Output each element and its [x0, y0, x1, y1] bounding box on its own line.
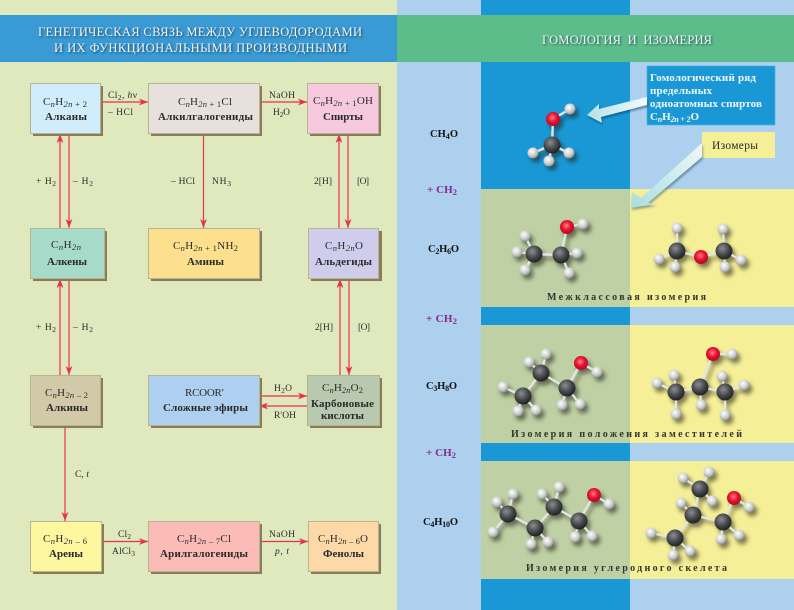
box: alcohols: n: [321, 98, 325, 108]
reaction condition labels: – HCl: [107, 108, 133, 118]
molecular formulas and CH2 increments: + CH: [426, 313, 452, 325]
box: alkenes: [30, 228, 107, 281]
reaction condition labels: 2[H]: [314, 177, 332, 187]
box: carboxylic acids: Карбоновые: [311, 398, 374, 410]
box: arenes: Арены: [49, 548, 83, 560]
box: alkenes: C: [51, 239, 58, 251]
box: alkenes: H: [64, 239, 72, 251]
reaction condition labels: AlCl: [112, 547, 131, 557]
box: aryl halides: Cl: [220, 533, 231, 545]
box: carboxylic acids: O: [351, 382, 359, 394]
box: alkenes: Алкены: [47, 256, 87, 268]
box: aldehydes: Альдегиды: [315, 256, 372, 268]
box: amines: C: [173, 240, 180, 252]
box: arenes: 2n – 6: [64, 536, 87, 546]
box: aldehydes: C: [325, 240, 332, 252]
callout: homologous series: Гомологический ряд: [650, 72, 756, 84]
reaction condition labels: 2[H]: [315, 323, 333, 333]
box: carboxylic acids: C: [322, 382, 329, 394]
box: esters: Сложные эфиры: [163, 402, 248, 414]
molecular formulas and CH2 increments: 4: [430, 520, 434, 529]
box: alcohols: OH: [357, 95, 373, 107]
molecular formulas and CH2 increments: H: [437, 381, 445, 392]
reaction condition labels: – HCl: [170, 177, 195, 187]
box: alkynes: n: [53, 390, 57, 400]
box: aryl halides: C: [177, 533, 184, 545]
molecule: propan-1-ol: [498, 348, 602, 416]
box: alkyl halides: C: [178, 96, 185, 108]
right panel background: [397, 0, 794, 610]
box: arenes: C: [43, 533, 50, 545]
box: alkynes: 2n – 2: [65, 390, 88, 400]
box: phenols: Фенолы: [323, 548, 364, 560]
box: alkyl halides: Cl: [221, 96, 232, 108]
molecule: ethanol: [512, 218, 588, 278]
callout: homologous series: O: [690, 111, 699, 123]
box: phenols: H: [330, 533, 338, 545]
callout: homologous series: C: [650, 111, 658, 123]
box: alkanes: Алканы: [45, 111, 87, 123]
molecular formulas and CH2 increments: 10: [442, 520, 450, 529]
callout: isomers: Изомеры: [712, 140, 758, 152]
molecular formulas and CH2 increments: 3: [433, 384, 437, 393]
box: carboxylic acids: кислоты: [321, 410, 364, 422]
caption: interclass isomerism: Межклассовая изомерия: [547, 292, 707, 303]
reaction condition labels: H: [273, 108, 280, 118]
box: aldehydes: H: [337, 240, 345, 252]
box: carboxylic acids: H: [334, 382, 342, 394]
box: aryl halides: 2n – 7: [197, 536, 220, 546]
caption: positional isomerism: Изомерия положения заместителей: [511, 429, 742, 440]
molecular formulas and CH2 increments: 8: [445, 384, 449, 393]
box: alkyl halides: H: [190, 96, 198, 108]
reaction condition labels: + H: [36, 323, 52, 333]
box: aryl halides: H: [189, 533, 197, 545]
molecular formulas and CH2 increments: O: [451, 244, 459, 255]
callout: homologous series: [647, 66, 775, 125]
reaction condition labels: 2: [52, 325, 56, 334]
callout: isomers: [702, 132, 775, 158]
box: aldehydes: [308, 228, 382, 281]
molecular formulas and CH2 increments: C: [426, 381, 434, 392]
box: amines: [148, 228, 262, 281]
box: phenols: 2n – 6: [338, 536, 360, 546]
reaction condition labels: ,: [122, 91, 127, 101]
reaction condition labels: [O]: [357, 177, 369, 187]
box: alkenes: n: [59, 242, 63, 252]
molecular formulas and CH2 increments: + CH: [427, 184, 453, 196]
molecular formulas and CH2 increments: 4: [446, 132, 450, 141]
reaction condition labels: hν: [128, 91, 137, 101]
left panel background: [0, 0, 397, 610]
reaction condition labels: + H: [36, 177, 52, 187]
box: carboxylic acids: n: [329, 385, 334, 395]
reaction condition labels: O: [285, 384, 292, 394]
reaction condition labels: 2: [52, 179, 56, 188]
box: phenols: O: [360, 533, 368, 545]
reaction condition labels: H: [274, 384, 281, 394]
arrow: to isomers: [631, 143, 702, 208]
heading band: homology and isomerism: ГОМОЛОГИЯ И ИЗОМЕРИЯ: [542, 33, 712, 47]
reaction condition labels: Cl: [108, 91, 117, 101]
box: alkyl halides: [148, 84, 262, 136]
molecular formulas and CH2 increments: [423, 129, 459, 529]
box: aryl halides: Арилгалогениды: [160, 548, 248, 560]
box: alkynes: Алкины: [46, 402, 88, 414]
molecular formulas and CH2 increments: 2: [452, 450, 456, 460]
heading band: homology and isomerism: [397, 15, 794, 62]
box: amines: Амины: [187, 256, 224, 268]
box: alkanes: n: [51, 99, 55, 109]
box: arenes: n: [51, 536, 55, 546]
callout: homologous series: одноатомных спиртов: [650, 98, 762, 110]
reaction condition labels: R′OH: [274, 411, 296, 421]
callout: homologous series: 2n + 2: [670, 115, 691, 124]
box: phenols: n: [325, 536, 330, 546]
box: amines: NH: [217, 240, 233, 252]
box: alkyl halides: Алкилгалогениды: [158, 111, 253, 123]
box: phenols: C: [318, 533, 325, 545]
reaction condition labels: 2: [127, 532, 131, 541]
molecular formulas and CH2 increments: H: [439, 244, 447, 255]
molecular formulas and CH2 increments: C: [428, 244, 436, 255]
box: alcohols: Спирты: [323, 111, 363, 123]
box: carboxylic acids: 2n: [342, 385, 351, 395]
box: alcohols: 2n + 1: [333, 98, 357, 108]
box: esters: RCOOR′: [185, 387, 224, 399]
box: alkanes: [30, 84, 103, 136]
molecular formulas and CH2 increments: H: [434, 517, 442, 528]
box: amines: 2: [234, 243, 238, 253]
molecular formulas and CH2 increments: O: [450, 517, 458, 528]
box: amines: 2n + 1: [194, 243, 217, 253]
box: alcohols: C: [313, 95, 320, 107]
box: alkyl halides: n: [186, 99, 190, 109]
reaction arrows: [60, 102, 349, 542]
molecule: butan-1-ol: [488, 482, 614, 550]
reaction condition labels: Cl: [118, 530, 127, 540]
callout: homologous series: предельных: [650, 85, 712, 97]
box: amines: n: [181, 243, 185, 253]
molecular formulas and CH2 increments: 6: [447, 247, 451, 256]
box: alcohols: H: [325, 95, 333, 107]
reaction condition labels: NH: [212, 177, 226, 187]
reaction condition labels: 2: [89, 325, 93, 334]
box: aryl halides: n: [185, 536, 189, 546]
callout: homologous series: n: [658, 115, 663, 124]
callout: homologous series: H: [662, 111, 671, 123]
reaction condition labels: C, t: [75, 470, 89, 480]
reaction condition labels: [O]: [358, 323, 370, 333]
reaction condition labels: p, t: [274, 547, 289, 557]
box: alkynes: [30, 376, 103, 428]
box: aldehydes: n: [333, 243, 337, 253]
box: alkanes: C: [43, 96, 50, 108]
molecule: methanol: [528, 104, 576, 166]
box: carboxylic acids: [308, 376, 382, 428]
molecular formulas and CH2 increments: C: [423, 517, 431, 528]
box: aryl halides: [148, 522, 262, 574]
molecular formulas and CH2 increments: CH: [430, 129, 446, 140]
arrow: to methanol: [587, 97, 647, 123]
reaction condition labels: O: [283, 108, 290, 118]
box: carboxylic acids: 2: [359, 385, 363, 395]
molecular formulas and CH2 increments: 2: [453, 187, 457, 197]
box: alkynes: C: [45, 387, 52, 399]
reaction condition labels: 2: [118, 93, 122, 102]
box: esters: [148, 376, 262, 428]
box: alkanes: H: [55, 96, 63, 108]
box: alcohols: [308, 84, 381, 136]
box: amines: H: [185, 240, 193, 252]
molecule: dimethyl ether: [654, 222, 746, 272]
reaction condition labels: 2: [280, 110, 284, 119]
reaction condition labels: 2: [89, 179, 93, 188]
box: alkyl halides: 2n + 1: [198, 99, 221, 109]
box: alkynes: H: [57, 387, 65, 399]
molecular formulas and CH2 increments: 2: [453, 316, 457, 326]
reaction condition labels: NaOH: [269, 91, 295, 101]
heading band: genetic link: [0, 15, 397, 62]
box: aldehydes: O: [355, 240, 363, 252]
molecular formulas and CH2 increments: 2: [435, 247, 439, 256]
box: phenols: [308, 522, 381, 574]
reaction condition labels: – H: [73, 177, 88, 187]
molecule: propan-2-ol: [652, 347, 750, 420]
reaction condition labels: 3: [131, 549, 135, 558]
box: arenes: [30, 522, 104, 574]
box: arenes: H: [55, 533, 63, 545]
box: alkanes: 2n + 2: [64, 99, 87, 109]
reaction condition labels: [36, 91, 370, 558]
molecule: 2-methylpropan-1-ol: [646, 466, 754, 560]
caption: carbon skeleton isomerism: Изомерия углеродного скелета: [526, 563, 727, 574]
molecular formulas and CH2 increments: O: [450, 129, 458, 140]
reaction condition labels: – H: [73, 323, 88, 333]
heading band: genetic link: ГЕНЕТИЧЕСКАЯ СВЯЗЬ МЕЖДУ УГЛЕВОДОРОДАМИ: [38, 25, 362, 39]
molecular formulas and CH2 increments: O: [449, 381, 457, 392]
reaction condition labels: 2: [281, 386, 285, 395]
reaction condition labels: 3: [227, 179, 231, 188]
heading band: genetic link: И ИХ ФУНКЦИОНАЛЬНЫМИ ПРОИЗВОДНЫМИ: [54, 41, 347, 55]
reaction condition labels: NaOH: [269, 530, 295, 540]
molecular formulas and CH2 increments: + CH: [426, 447, 452, 459]
box: alkenes: 2n: [72, 242, 81, 252]
box: aldehydes: 2n: [346, 243, 355, 253]
